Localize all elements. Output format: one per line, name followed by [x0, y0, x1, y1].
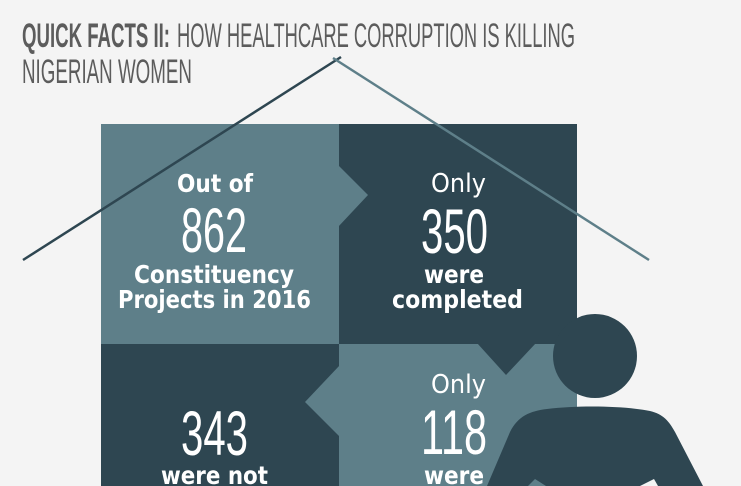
panel: 862 projects — [101, 124, 339, 344]
panel: puzzle grid — [101, 124, 577, 486]
text block: only 350: completed — [392, 285, 523, 314]
text block: out of 862: Constituency — [134, 260, 294, 289]
text block: 343 — [161, 399, 268, 486]
puzzle tab: down — [477, 343, 536, 375]
title: QUICK FACTS II: — [22, 17, 170, 55]
icon: woman figure — [487, 314, 703, 486]
panel: 118 — [339, 344, 577, 486]
text block: only 350: Only — [431, 169, 486, 199]
head — [553, 314, 637, 398]
body — [487, 407, 703, 486]
arm gap: right — [640, 479, 658, 486]
text block: out of 862: Out of — [177, 169, 254, 198]
text block: only 118: Only — [431, 370, 486, 400]
text block: only 118 — [421, 370, 487, 486]
text block: out of 862 — [118, 169, 311, 314]
title — [22, 17, 575, 91]
text block: only 350: 350 — [421, 197, 488, 267]
title: NIGERIAN WOMEN — [22, 53, 192, 91]
text block: out of 862: 862 — [181, 196, 247, 266]
arm gap: left — [528, 479, 546, 486]
text block: 343: 343 — [181, 399, 248, 469]
puzzle tab: right — [338, 165, 368, 227]
roof line: left — [23, 57, 341, 260]
text block: out of 862: Projects in 2016 — [118, 285, 311, 314]
text block: only 350: were — [424, 260, 484, 289]
panel: 343 not completed — [101, 344, 339, 486]
puzzle tab: left — [305, 365, 340, 437]
text block: only 118: 118 — [421, 398, 487, 468]
panel: 350 completed — [339, 124, 577, 344]
text block: only 350 — [392, 169, 523, 314]
roof line: right — [333, 58, 649, 260]
